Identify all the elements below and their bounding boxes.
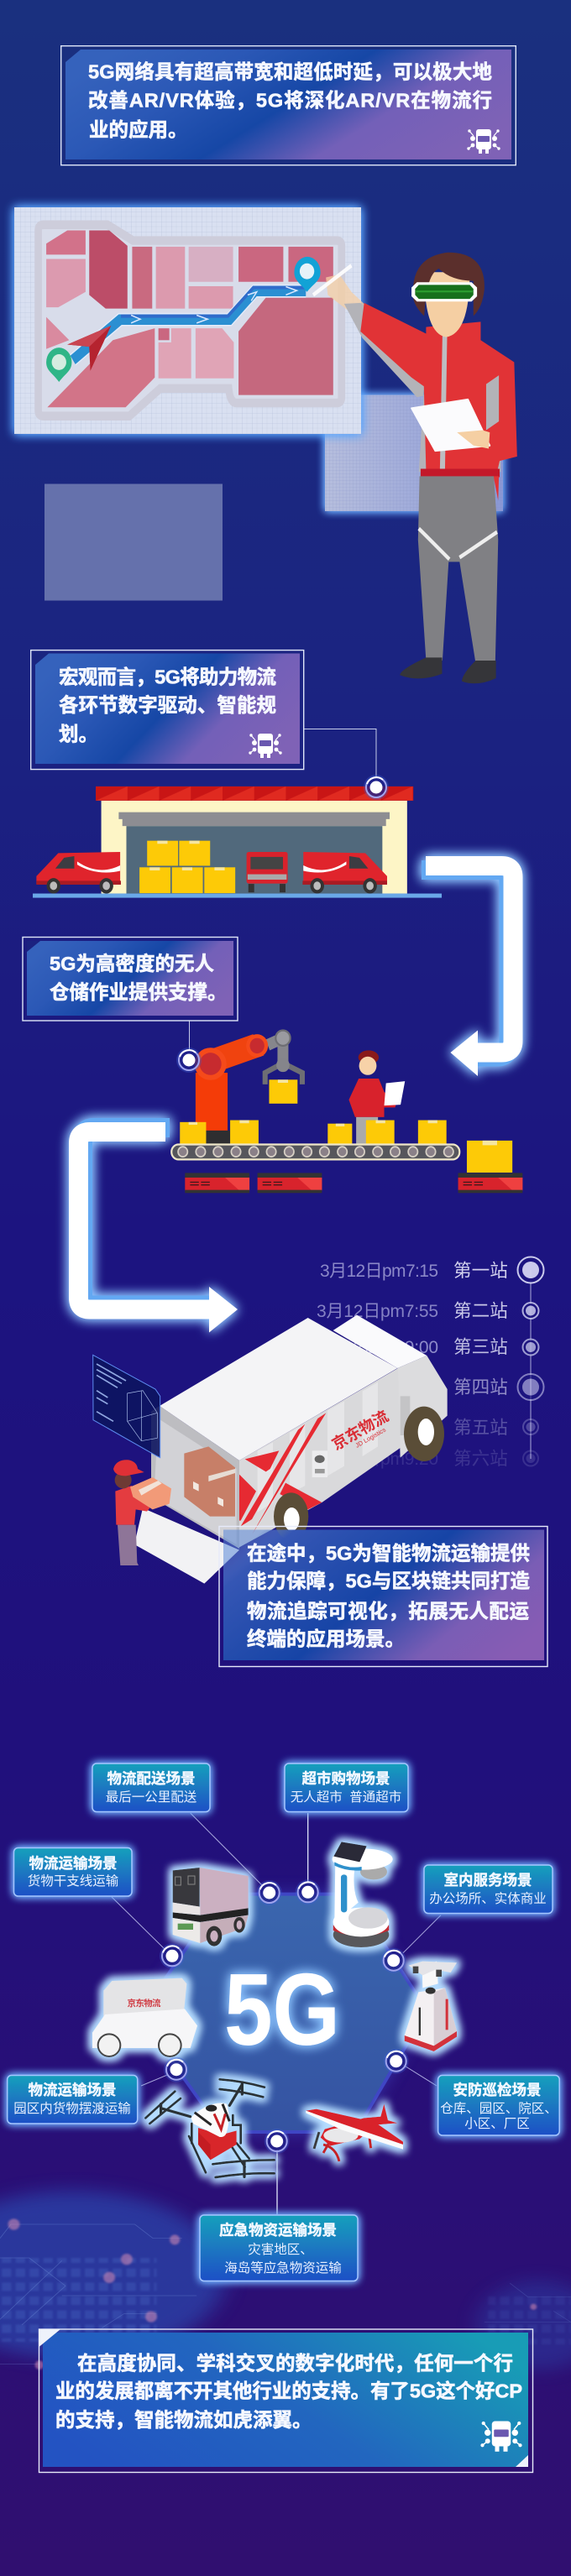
- conveyor belt: [171, 1144, 459, 1159]
- courier: [113, 1460, 171, 1565]
- label: security patrol scenario: 小区、厂区: [464, 2116, 530, 2131]
- cab: [333, 1315, 427, 1368]
- van left: [36, 852, 121, 894]
- route line: [73, 286, 306, 360]
- row 5: [453, 1417, 538, 1438]
- cargo box: [160, 1318, 397, 1460]
- icon: robot: [249, 734, 282, 758]
- ramp: [134, 1508, 239, 1584]
- row 2: [317, 1300, 539, 1321]
- text panel: conclusion: 业的发展都离不开其他行业的支持。有了5G这个好CP: [55, 2380, 522, 2402]
- text panel: macro: 划。: [59, 724, 98, 745]
- map floor plan: [39, 225, 342, 416]
- autonomous car: [92, 1978, 197, 2056]
- robot arm: [195, 1031, 302, 1145]
- row 1: [320, 1257, 544, 1283]
- label: emergency scenario: 海岛等应急物资运输: [224, 2260, 342, 2276]
- label: delivery scenario: 物流配送场景: [107, 1770, 195, 1787]
- icon: green pin: [46, 347, 71, 382]
- text panel: in transit: 在途中，5G为智能物流运输提供: [247, 1541, 530, 1565]
- parcels on belt: [180, 1079, 512, 1173]
- cargo drone: [145, 2079, 275, 2177]
- text panel: in transit: 能力保障，5G与区块链共同打造: [247, 1570, 531, 1591]
- text panel: macro: [31, 651, 304, 770]
- node: warehouse: [364, 775, 389, 800]
- background circuit pattern: [0, 2191, 571, 2370]
- wheels: [274, 1492, 308, 1540]
- trousers: [418, 476, 498, 663]
- text panel: 5G AR/VR: [61, 46, 516, 165]
- JD dog mark: [312, 1450, 327, 1477]
- text panel: 5G AR/VR: 5G网络具有超高带宽和超低时延，可以极大地: [88, 60, 492, 82]
- label: emergency scenario: 应急物资运输场景: [219, 2222, 337, 2239]
- cargo parcels: [184, 1446, 235, 1517]
- label: emergency scenario: [200, 2215, 358, 2281]
- arrow: sorting to truck: [79, 1128, 238, 1333]
- hub nodes: [160, 1879, 409, 2154]
- 5G title: 5G: [224, 1952, 340, 2067]
- AR visor: [411, 282, 477, 301]
- text panel: conclusion: 的支持，智能物流如虎添翼。: [55, 2409, 312, 2431]
- icon: blue pin: [294, 257, 321, 292]
- label: transport scenario: 物流运输场景: [29, 1855, 118, 1872]
- row 1: 3月12日pm7:15: [320, 1262, 438, 1281]
- delivery bus: [173, 1868, 249, 1946]
- van front: [247, 852, 288, 892]
- fixed wing plane: [306, 2104, 403, 2161]
- row 2: 第二站: [453, 1300, 508, 1321]
- AGV carts: [185, 1173, 522, 1193]
- label: delivery scenario: 最后一公里配送: [106, 1790, 197, 1805]
- label: security patrol scenario: 安防巡检场景: [453, 2082, 541, 2098]
- label: park shuttle scenario: 物流运输场景: [29, 2082, 116, 2098]
- label: indoor service scenario: 办公场所、实体商业: [429, 1891, 547, 1906]
- label: emergency scenario: 灾害地区、: [248, 2242, 313, 2257]
- row 6: [317, 1448, 538, 1469]
- label: indoor service scenario: [424, 1865, 553, 1914]
- label: security patrol scenario: [438, 2075, 559, 2135]
- truck logo: 京东物流: [329, 1407, 392, 1453]
- row 6: 3月12日pm9:20: [317, 1450, 438, 1469]
- panel: secondary grid panels: [45, 394, 503, 601]
- text panel: warehouse support: [23, 937, 238, 1021]
- label: supermarket scenario: [285, 1763, 408, 1811]
- car logo: 京东物流: [128, 1998, 161, 2009]
- worker: [348, 1050, 405, 1145]
- label: delivery scenario: [92, 1763, 210, 1811]
- node: robot arm: [176, 1048, 202, 1073]
- icon: robot: [467, 129, 500, 154]
- text panel: in transit: 物流追踪可视化，拓展无人配运: [247, 1600, 529, 1622]
- icon: robot: [480, 2421, 522, 2452]
- label: transport scenario: 货物干支线运输: [28, 1873, 119, 1889]
- red X livery: [239, 1413, 326, 1534]
- row 6: 第六站: [453, 1448, 508, 1469]
- timeline: [317, 1257, 544, 1469]
- row 5: 第五站: [453, 1417, 508, 1438]
- navigation arrow: [67, 326, 111, 371]
- row 1: 第一站: [453, 1260, 508, 1281]
- label: supermarket scenario: 无人超市 普通超市: [291, 1790, 401, 1805]
- text panel: conclusion: 在高度协同、学科交叉的数字化时代，任何一个行: [77, 2352, 513, 2374]
- map panel with route: [14, 207, 361, 434]
- data panel: [93, 1355, 160, 1458]
- text panel: conclusion: [39, 2329, 532, 2473]
- row 3: [317, 1336, 539, 1357]
- label: supermarket scenario: 超市购物场景: [302, 1770, 390, 1787]
- row 4: [453, 1374, 544, 1400]
- 5G hexagon hub: [139, 1894, 427, 2132]
- text panel: 5G AR/VR: 业的应用。: [89, 119, 188, 141]
- text panel: macro: 各环节数字驱动、智能规: [59, 694, 276, 716]
- shoes: [400, 657, 496, 683]
- rear opening: [151, 1406, 239, 1549]
- scenario vehicles: [92, 1842, 457, 2056]
- illustration: man with AR glasses: [313, 253, 517, 683]
- text panel: warehouse support: 仓储作业提供支撑。: [50, 981, 227, 1003]
- patrol robot: [405, 1962, 457, 2051]
- arrow: warehouse to sorting: [422, 866, 513, 1076]
- van right: [302, 852, 387, 894]
- head: [424, 272, 469, 337]
- illustration: warehouse: [33, 729, 442, 898]
- text panel: in transit: [219, 1526, 547, 1667]
- text panel: warehouse support: 5G为高密度的无人: [50, 952, 214, 974]
- stacked parcels: [139, 841, 235, 893]
- tablet: [411, 400, 490, 451]
- row 4: 第四站: [453, 1377, 508, 1398]
- row 3: 3月12日pm9:00: [317, 1338, 438, 1357]
- row 2: 3月12日pm7:55: [317, 1302, 438, 1321]
- row 3: 第三站: [453, 1336, 508, 1357]
- illustration: delivery truck: [93, 1315, 448, 1584]
- label: security patrol scenario: 仓库、园区、院区、: [440, 2100, 558, 2116]
- service robot: [333, 1842, 393, 1947]
- label: indoor service scenario: 室内服务场景: [443, 1872, 532, 1889]
- illustration: sorting line: [171, 1021, 522, 1193]
- label: park shuttle scenario: 园区内货物摆渡运输: [13, 2101, 131, 2116]
- connector lines: [112, 1813, 441, 2214]
- label: transport scenario: [13, 1848, 132, 1896]
- text panel: in transit: 终端的应用场景。: [247, 1628, 405, 1650]
- text panel: macro: 宏观而言，5G将助力物流: [59, 666, 276, 688]
- label: park shuttle scenario: [8, 2075, 138, 2124]
- truck logo: JD Logistics: [354, 1426, 387, 1450]
- text panel: 5G AR/VR: 改善AR/VR体验，5G将深化AR/VR在物流行: [88, 89, 492, 111]
